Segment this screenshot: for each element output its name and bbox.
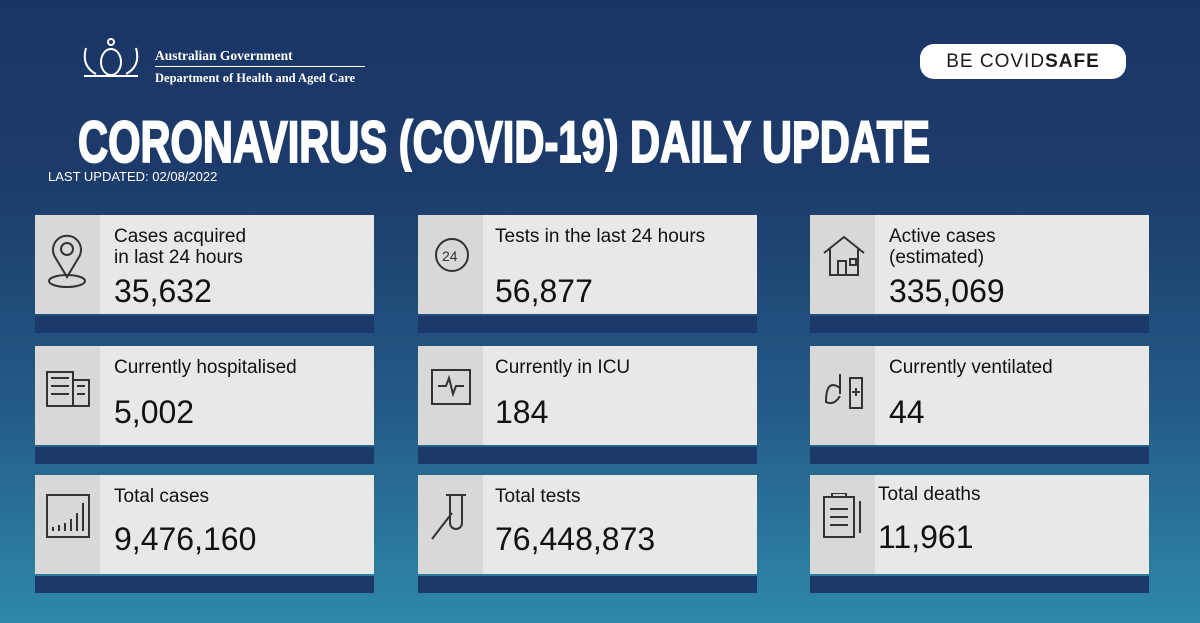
- panel: tests 24h: Tests in the last 24 hours: [495, 226, 705, 247]
- badge: BE COVIDSAFE: [920, 44, 1126, 79]
- panel: active cases: (estimated): [889, 247, 984, 268]
- icon: 24: [435, 238, 469, 272]
- icon: test tube: [431, 494, 466, 540]
- badge: BE COVIDSAFE: BE COVIDSAFE: [946, 51, 1100, 72]
- panel: hospitalised: Currently hospitalised: [114, 357, 297, 378]
- panel: cases acquired: [35, 215, 374, 333]
- icon: house: [823, 236, 864, 276]
- panel: ventilated: 44: [889, 394, 925, 430]
- last updated: LAST UPDATED: 02/08/2022: [48, 169, 217, 184]
- panel: total deaths: 11,961: [878, 519, 974, 555]
- panel: tests 24h: [418, 215, 757, 333]
- panel: total deaths: [810, 475, 1149, 593]
- panel: total cases: 9,476,160: [114, 521, 256, 557]
- panel: cases acquired: Cases acquired: [114, 226, 246, 247]
- icon: 24: 24: [442, 248, 458, 264]
- panel: ventilated: [810, 346, 1149, 464]
- logo: Australian Government: [84, 38, 365, 85]
- panel: total tests: [418, 475, 757, 593]
- panel: total cases: [35, 475, 374, 593]
- panel: active cases: [810, 215, 1149, 333]
- panel: total cases: Total cases: [114, 486, 209, 507]
- panel: cases acquired: 35,632: [114, 273, 212, 309]
- icon: coat of arms: [84, 38, 138, 77]
- panel: ICU: 184: [495, 394, 548, 430]
- panel: tests 24h: 56,877: [495, 273, 593, 309]
- icon: chart: [46, 494, 90, 538]
- icon: hospital: [46, 371, 90, 407]
- panel: hospitalised: 5,002: [114, 394, 194, 430]
- panel: ICU: Currently in ICU: [495, 357, 630, 378]
- icon: location pin: [48, 234, 86, 288]
- panel: hospitalised: [35, 346, 374, 464]
- panel: total tests: 76,448,873: [495, 521, 655, 557]
- panel: total tests: Total tests: [495, 486, 581, 507]
- panel: active cases: 335,069: [889, 273, 1005, 309]
- logo: Australian Government: Department of Health and Aged Care: [155, 71, 355, 85]
- panel: ventilated: Currently ventilated: [889, 357, 1053, 378]
- icon: monitor: [431, 369, 471, 405]
- logo: Australian Government: Australian Government: [155, 48, 293, 63]
- panel: ICU: [418, 346, 757, 464]
- icon: lungs: [825, 374, 863, 409]
- panel: active cases: Active cases: [889, 226, 996, 247]
- panel: total deaths: Total deaths: [878, 484, 980, 505]
- icon: clipboard: [823, 493, 861, 538]
- panel: cases acquired: in last 24 hours: [114, 247, 243, 268]
